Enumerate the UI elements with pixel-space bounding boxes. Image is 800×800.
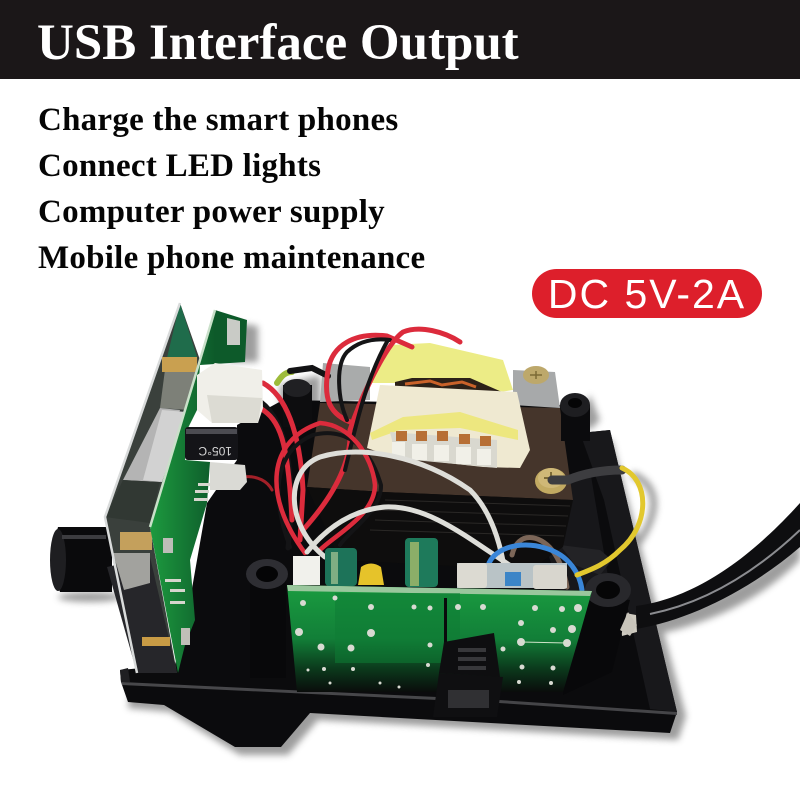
feature list: Charge the smart phones — [38, 102, 398, 138]
header band — [0, 0, 800, 79]
power circuit board — [287, 585, 592, 692]
transformer core — [307, 403, 573, 570]
front display panel — [105, 303, 200, 673]
power cable — [620, 503, 800, 636]
feature list: Computer power supply — [38, 194, 385, 230]
board capacitors and fuse — [293, 538, 567, 589]
power switch — [433, 633, 503, 717]
rear ground wire — [277, 368, 328, 383]
tray mounting post left — [246, 559, 288, 678]
cable clip solder — [620, 612, 637, 636]
transformer brackets and screws — [320, 363, 567, 494]
feature list: Mobile phone maintenance — [38, 240, 425, 276]
board capacitor: 105°C — [198, 444, 232, 458]
housing tray — [120, 400, 677, 747]
display circuit board — [150, 310, 247, 673]
board capacitor — [185, 427, 238, 460]
transformer coil — [367, 343, 530, 468]
photo illustration: opened power unit — [50, 302, 800, 760]
title: USB Interface Output — [37, 15, 519, 71]
wiring — [243, 329, 517, 572]
board connectors — [197, 363, 263, 490]
rotary knob — [50, 527, 112, 592]
mains wires — [487, 468, 643, 590]
tray mounting posts right — [283, 379, 631, 695]
cast shadows — [58, 322, 800, 755]
feature list: Connect LED lights — [38, 148, 321, 184]
feature list — [38, 102, 425, 276]
badge: output rating: DC 5V-2A — [548, 271, 746, 317]
